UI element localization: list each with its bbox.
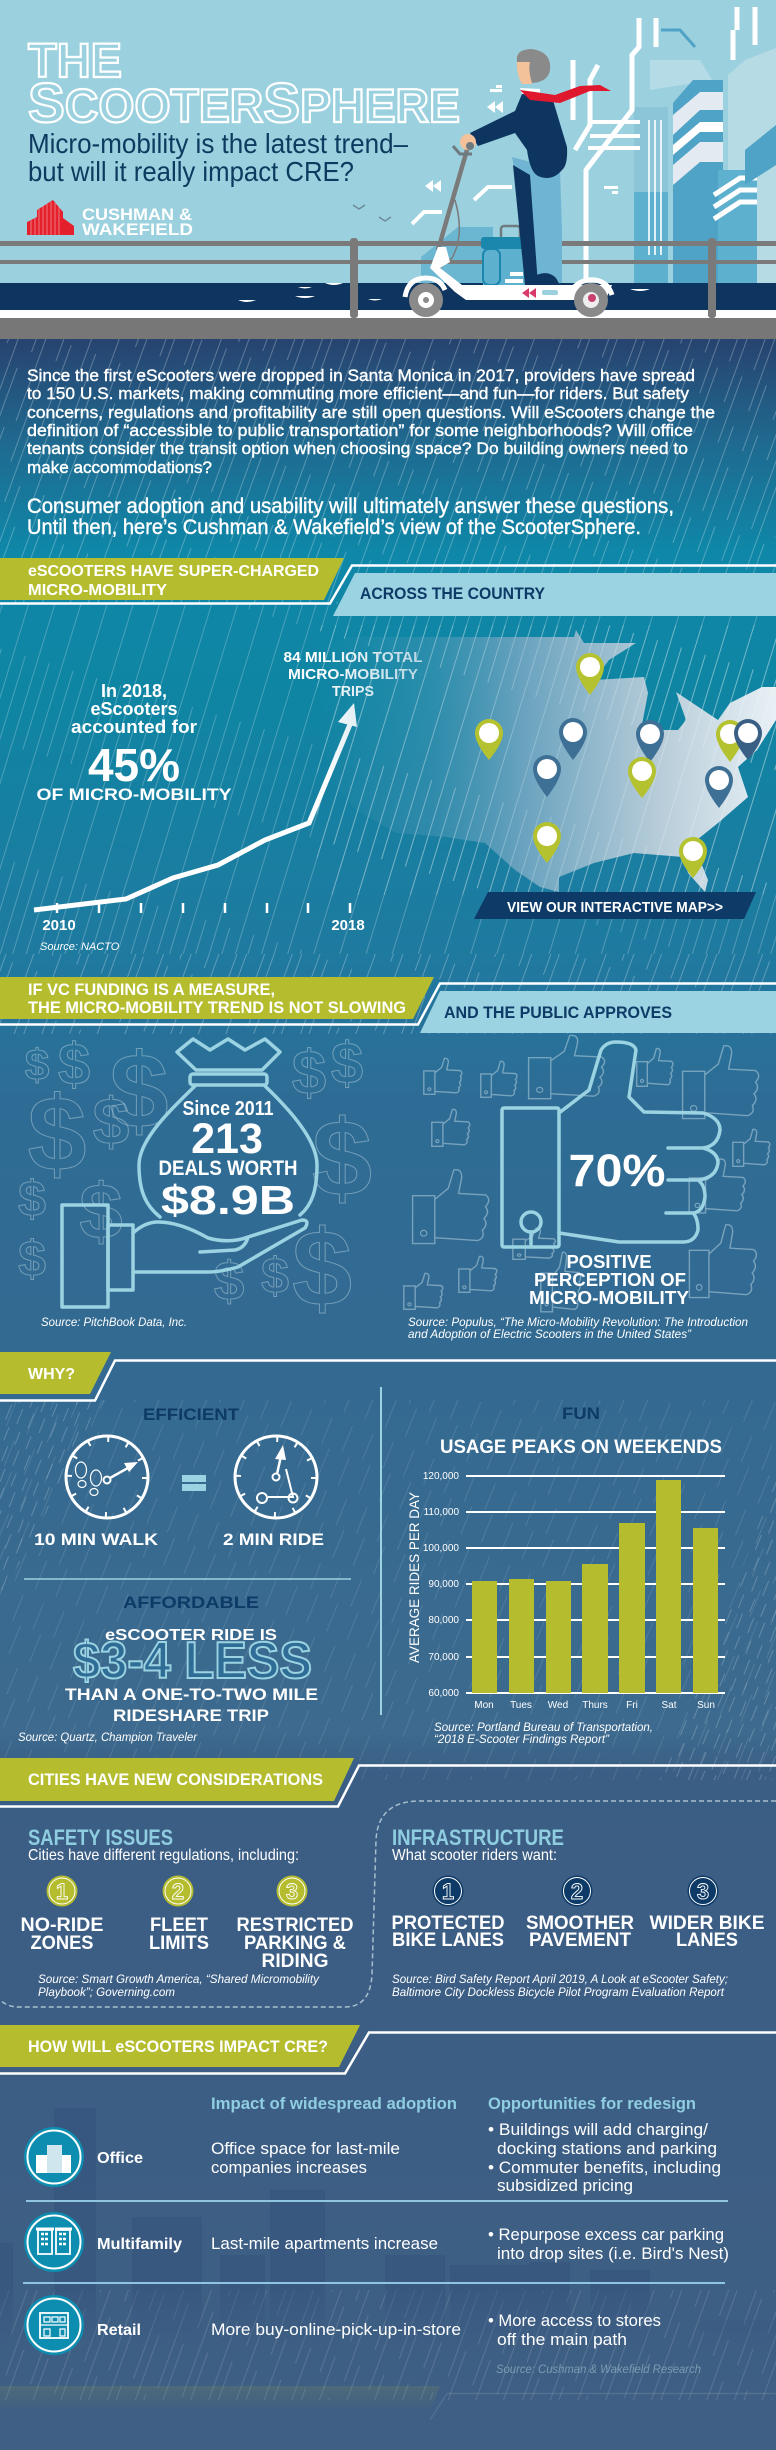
button: view interactive map: VIEW OUR INTERACTIVE MAP>> xyxy=(507,899,723,916)
source: Portland Bureau of Transportation: “2018 E-Scooter Findings Report” xyxy=(434,1734,610,1746)
VC funding stat: DEALS WORTH xyxy=(158,1157,298,1180)
title xyxy=(28,35,460,134)
public approval stat: MICRO-MOBILITY xyxy=(529,1288,689,1308)
wheels xyxy=(405,278,612,317)
bar chart: average rides per day: 90,000 xyxy=(428,1579,459,1590)
scooter stem xyxy=(438,143,469,250)
intro paragraph: to 150 U.S. markets, making commuting more efficient—and fun—for riders. But safety xyxy=(27,384,689,403)
row: retail: off the main path xyxy=(497,2330,627,2349)
badges: infrastructure numbers: 1 xyxy=(442,1879,454,1904)
badges: infrastructure numbers: 3 xyxy=(697,1879,709,1904)
intro closing statement xyxy=(27,495,674,539)
bar chart: average rides per day: 80,000 xyxy=(428,1615,459,1626)
row: multifamily: Multifamily xyxy=(97,2236,182,2253)
icon: clock with scooter xyxy=(235,1436,317,1518)
title: SCOOTERSPHERE xyxy=(28,71,460,134)
bar chart: average rides per day: 110,000 xyxy=(424,1507,459,1518)
badges: infrastructure numbers: 2 xyxy=(571,1879,583,1904)
title: THE xyxy=(28,35,122,88)
bar chart: average rides per day: AVERAGE RIDES PER DAY xyxy=(406,1491,422,1663)
row: retail xyxy=(24,2295,661,2355)
city skyline xyxy=(412,7,776,283)
bar chart: average rides per day: 70,000 xyxy=(428,1652,459,1663)
badges: safety numbers: 2 xyxy=(172,1879,184,1904)
row: retail: Retail xyxy=(97,2322,141,2339)
background dollar signs: $ xyxy=(110,1032,168,1150)
bar chart: average rides per day xyxy=(406,1471,725,1711)
bar chart: average rides per day: Tues xyxy=(510,1700,532,1711)
panel: infrastructure: Source: Bird Safety Report April 2019, A Look at eScooter Safety; xyxy=(392,1972,728,1986)
labels: infrastructure: LANES xyxy=(676,1930,738,1951)
logo: Cushman & Wakefield: CUSHMAN & xyxy=(82,205,192,224)
VC funding stat: 213 xyxy=(191,1115,263,1163)
labels: safety: ZONES xyxy=(30,1933,94,1954)
background skyline xyxy=(0,2108,776,2350)
labels: walk and ride: 2 MIN RIDE xyxy=(223,1530,324,1549)
water xyxy=(0,283,776,310)
panel: infrastructure: INFRASTRUCTURE xyxy=(392,1825,564,1850)
labels: safety: NO-RIDE xyxy=(20,1915,104,1936)
background dollar signs: $ xyxy=(292,1039,326,1108)
row: office: docking stations and parking xyxy=(497,2139,717,2158)
labels: infrastructure: PROTECTED xyxy=(392,1913,504,1934)
row: office: Office space for last-mile xyxy=(211,2139,400,2158)
icon: large thumbs up xyxy=(502,1042,720,1247)
panel: public approves heading: AND THE PUBLIC APPROVES xyxy=(444,1003,672,1022)
public approval stat xyxy=(529,1145,689,1308)
intro paragraph: Since the first eScooters were dropped in Santa Monica in 2017, providers have spread xyxy=(27,366,695,385)
panel: infrastructure xyxy=(392,1825,764,1999)
icon: multifamily xyxy=(24,2212,84,2272)
labels: safety: RESTRICTED xyxy=(236,1915,354,1936)
public approval stat: 70% xyxy=(568,1145,666,1196)
head xyxy=(517,52,532,84)
background dollar signs: $ xyxy=(93,1084,129,1158)
subtitle: Micro-mobility is the latest trend– xyxy=(28,128,408,159)
intro paragraph: definition of “accessible to public transportation” for some neighborhoods? Will office xyxy=(27,421,693,440)
public approval stat: POSITIVE xyxy=(566,1252,652,1272)
badges: safety numbers: 1 xyxy=(56,1879,68,1904)
panel: safety issues: Cities have different regulations, including: xyxy=(28,1847,299,1864)
jacket xyxy=(470,94,567,178)
labels: infrastructure: PAVEMENT xyxy=(529,1930,631,1951)
row: multifamily: • Repurpose excess car parking xyxy=(488,2225,724,2244)
map pins xyxy=(475,653,762,878)
background dollar signs: $ xyxy=(18,1231,46,1287)
panel: VC funding heading: IF VC FUNDING IS A MEASURE, xyxy=(28,980,275,999)
chart: growth line: 2018 xyxy=(331,917,365,934)
chart: growth line: 2010 xyxy=(42,917,76,934)
birds xyxy=(353,205,391,221)
row: office: • Buildings will add charging/ xyxy=(488,2120,708,2139)
heading: efficient: EFFICIENT xyxy=(143,1405,240,1424)
background dollar signs: $ xyxy=(79,1167,123,1255)
chart: growth line xyxy=(34,703,365,953)
affordable stat: $3-4 LESS xyxy=(73,1632,312,1690)
affordable stat xyxy=(65,1627,318,1725)
column headings: Opportunities for redesign xyxy=(488,2095,696,2113)
labels: safety: PARKING & xyxy=(244,1933,346,1954)
icon: equals xyxy=(182,1475,206,1491)
source: Populus xyxy=(408,1317,748,1341)
chart callout xyxy=(284,649,422,700)
stat: 45 percent: 45% xyxy=(88,739,180,791)
background dollar signs: $ xyxy=(25,1041,49,1090)
subtitle xyxy=(28,128,408,187)
faded footer band xyxy=(0,2386,776,2420)
intro closing statement: Until then, here’s Cushman & Wakefield’s view of the ScooterSphere. xyxy=(27,516,641,539)
rider on scooter xyxy=(405,49,612,317)
VC funding stat: Since 2011 xyxy=(182,1098,274,1120)
icon: clock with footprints xyxy=(66,1436,148,1518)
panel: infrastructure: What scooter riders want: xyxy=(392,1847,557,1864)
VC funding stat: $8.9B xyxy=(161,1177,295,1223)
chart: growth line: Source: NACTO xyxy=(40,941,120,953)
row: office: companies increases xyxy=(211,2158,367,2177)
background dollar signs: $ xyxy=(18,1171,46,1227)
panel: why heading: WHY? xyxy=(28,1366,75,1383)
labels: infrastructure: WIDER BIKE xyxy=(650,1913,764,1934)
column headings: Impact of widespread adoption xyxy=(211,2095,457,2113)
labels: infrastructure: SMOOTHER xyxy=(526,1913,634,1934)
intro paragraph: concerns, regulations and profitability are still open questions. Will eScooters change the xyxy=(27,403,715,422)
bar chart: average rides per day: Wed xyxy=(548,1700,568,1711)
pavement xyxy=(0,310,776,319)
public approval stat: PERCEPTION OF xyxy=(534,1270,686,1290)
labels: safety: RIDING xyxy=(262,1951,328,1972)
chart callout: MICRO-MOBILITY xyxy=(288,666,418,683)
labels: walk and ride: 10 MIN WALK xyxy=(34,1530,159,1549)
bar chart: average rides per day: 120,000 xyxy=(423,1471,459,1482)
row: multifamily: into drop sites (i.e. Bird's Nest) xyxy=(497,2244,729,2263)
panel: CRE impact heading: HOW WILL eSCOOTERS IMPACT CRE? xyxy=(28,2037,328,2056)
intro paragraph: tenants consider the transit option when choosing space? Do building owners need to xyxy=(27,439,688,458)
icon: retail xyxy=(24,2295,84,2355)
background small thumbs xyxy=(404,1035,770,1312)
bar chart: average rides per day: Fri xyxy=(626,1700,638,1711)
panel: cities heading: CITIES HAVE NEW CONSIDERATIONS xyxy=(28,1770,323,1789)
badges: safety numbers: 3 xyxy=(286,1879,298,1904)
background dollar signs: $ xyxy=(331,1031,363,1096)
row: office: subsidized pricing xyxy=(497,2176,633,2195)
panel: VC funding heading xyxy=(0,977,434,1019)
legs xyxy=(512,157,562,285)
stat: 45 percent xyxy=(36,681,232,804)
labels: walk and ride xyxy=(34,1530,324,1549)
bar chart: average rides per day: 100,000 xyxy=(423,1543,459,1554)
background dollar signs: $ xyxy=(214,1250,244,1312)
bar chart: average rides per day: Thurs xyxy=(582,1700,608,1711)
source: Populus: Source: Populus, “The Micro-Mobility Revolution: The Introduction xyxy=(408,1317,748,1329)
heading: fun: FUN xyxy=(562,1404,600,1423)
panel: VC funding heading: THE MICRO-MOBILITY TREND IS NOT SLOWING xyxy=(28,998,406,1017)
labels: infrastructure: BIKE LANES xyxy=(392,1930,504,1951)
hero banner xyxy=(0,0,776,339)
button: view interactive map xyxy=(474,892,756,919)
panel: why heading xyxy=(0,1352,111,1394)
panel: safety issues: Playbook”; Governing.com xyxy=(38,1985,175,1999)
intro paragraph: make accommodations? xyxy=(27,458,212,477)
intro closing statement: Consumer adoption and usability will ultimately answer these questions, xyxy=(27,495,674,518)
source: Cushman & Wakefield Research: Source: Cushman & Wakefield Research xyxy=(496,2362,701,2376)
subtitle: but will it really impact CRE? xyxy=(28,156,354,187)
background dollar signs: $ xyxy=(28,1075,86,1193)
affordable stat: THAN A ONE-TO-TWO MILE xyxy=(65,1685,318,1704)
panel: super-charged heading xyxy=(0,558,344,600)
background dollar signs: $ xyxy=(292,1207,352,1328)
VC funding stat xyxy=(158,1098,298,1223)
source: Quartz: Source: Quartz, Champion Traveler xyxy=(18,1732,198,1744)
logo: Cushman & Wakefield: WAKEFIELD xyxy=(82,220,193,239)
column headings xyxy=(211,2095,696,2113)
row: office: Office xyxy=(97,2150,143,2167)
panel: across the country heading: ACROSS THE COUNTRY xyxy=(360,584,546,603)
railing xyxy=(0,238,776,318)
background dollar signs: $ xyxy=(312,1097,372,1218)
source: PitchBook: Source: PitchBook Data, Inc. xyxy=(41,1317,187,1329)
panel: CRE impact heading xyxy=(0,2025,360,2067)
panel: safety issues: Source: Smart Growth America, “Shared Micromobility xyxy=(38,1972,320,1986)
labels: safety: LIMITS xyxy=(149,1933,209,1954)
bar chart: average rides per day: Mon xyxy=(474,1700,494,1711)
panel: super-charged heading: eSCOOTERS HAVE SUPER-CHARGED xyxy=(28,563,319,580)
map of the United States xyxy=(317,625,776,895)
background dollar signs: $ xyxy=(58,1032,90,1097)
row: retail: More buy-online-pick-up-in-store xyxy=(211,2320,461,2339)
panel: cities heading xyxy=(0,1758,354,1801)
intro paragraph xyxy=(27,366,715,477)
badges: infrastructure numbers xyxy=(432,1876,718,1906)
row: multifamily xyxy=(24,2212,729,2272)
bag xyxy=(481,226,527,285)
heading: affordable: AFFORDABLE xyxy=(123,1593,259,1612)
stat: 45 percent: In 2018, xyxy=(101,681,167,701)
necktie xyxy=(520,85,611,103)
shirt collar xyxy=(520,88,540,99)
stat: 45 percent: eScooters xyxy=(90,699,178,719)
bar chart: average rides per day: 60,000 xyxy=(428,1688,459,1699)
labels: safety: FLEET xyxy=(150,1915,208,1936)
scooter body xyxy=(430,247,612,300)
chart title: USAGE PEAKS ON WEEKENDS xyxy=(440,1437,722,1458)
panel: infrastructure: Baltimore City Dockless Bicycle Pilot Program Evaluation Report xyxy=(392,1985,725,1999)
row: office xyxy=(24,2120,721,2195)
panel: safety issues: SAFETY ISSUES xyxy=(28,1825,173,1850)
source: Portland Bureau of Transportation xyxy=(434,1722,653,1746)
source: Portland Bureau of Transportation: Source: Portland Bureau of Transportation, xyxy=(434,1722,653,1734)
background dollar signs xyxy=(18,1031,372,1328)
icon: office xyxy=(24,2127,84,2187)
row: office: • Commuter benefits, including xyxy=(488,2158,721,2177)
icon: money bag and hand xyxy=(62,1039,317,1307)
logo: Cushman & Wakefield xyxy=(27,200,193,239)
affordable stat: RIDESHARE TRIP xyxy=(113,1706,269,1725)
labels: safety xyxy=(20,1915,354,1972)
labels: infrastructure xyxy=(392,1913,764,1951)
row: retail: • More access to stores xyxy=(488,2311,661,2330)
background dollar signs: $ xyxy=(261,1248,289,1304)
motion arrows xyxy=(425,85,618,194)
bar chart: average rides per day: Sat xyxy=(661,1700,677,1711)
chart callout: 84 MILLION TOTAL xyxy=(284,649,422,666)
badges: safety numbers xyxy=(46,1876,308,1906)
panel: across the country heading xyxy=(333,573,776,616)
affordable stat: eSCOOTER RIDE IS xyxy=(105,1627,277,1644)
stat: 45 percent: accounted for xyxy=(71,717,197,737)
panel: super-charged heading: MICRO-MOBILITY xyxy=(28,582,167,599)
chart callout: TRIPS xyxy=(332,683,374,700)
panel: public approves heading xyxy=(420,991,776,1033)
panel: safety issues xyxy=(20,1825,354,1999)
row: multifamily: Last-mile apartments increase xyxy=(211,2234,438,2253)
stat: 45 percent: OF MICRO-MOBILITY xyxy=(36,785,232,804)
bar chart: average rides per day: Sun xyxy=(697,1700,715,1711)
source: Populus: and Adoption of Electric Scooters in the United States” xyxy=(408,1329,692,1341)
